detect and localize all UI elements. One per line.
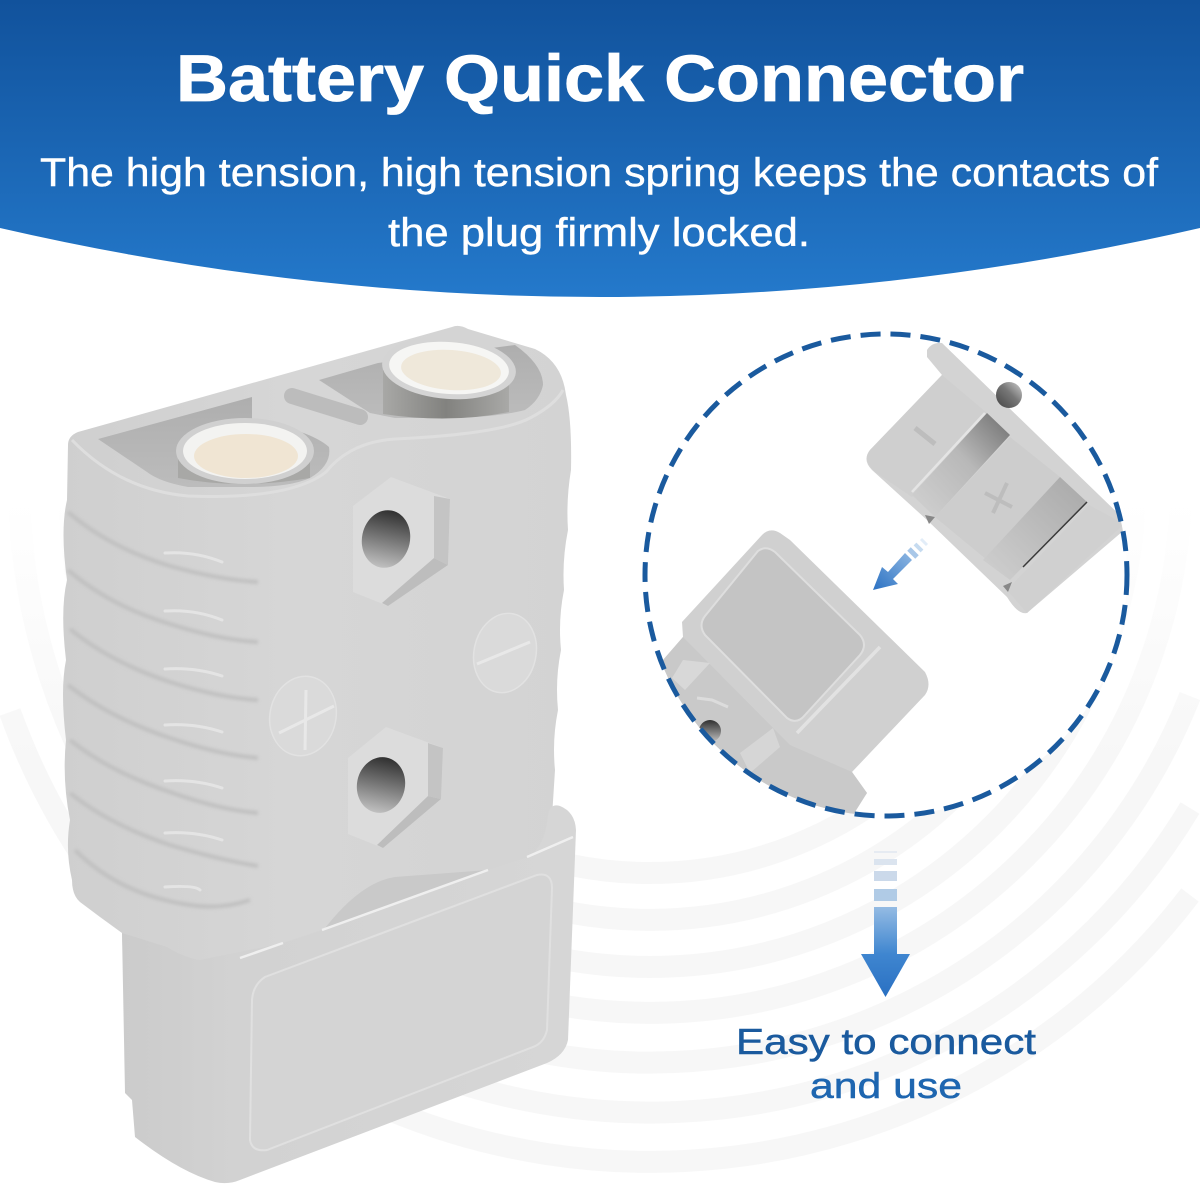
hole bbox=[996, 382, 1022, 408]
channel bbox=[918, 413, 1010, 512]
connector pieces bbox=[630, 343, 1130, 820]
detail circle bbox=[630, 334, 1130, 820]
panel bbox=[702, 548, 864, 721]
header banner bbox=[0, 0, 1200, 297]
upper connector piece bbox=[866, 343, 1130, 613]
subtitle: The high tension, high tension spring keeps the contacts of bbox=[40, 151, 1159, 195]
right terminal bbox=[380, 332, 518, 419]
caption: and use bbox=[810, 1065, 962, 1106]
subtitle: the plug firmly locked. bbox=[388, 211, 810, 255]
rim highlight bbox=[72, 390, 563, 496]
left terminal recess bbox=[98, 397, 329, 487]
caption: Easy to connect bbox=[736, 1021, 1036, 1062]
hole bbox=[352, 753, 410, 817]
minus mark bbox=[915, 428, 935, 444]
body ribs bbox=[68, 512, 258, 907]
handle bbox=[122, 805, 576, 1183]
connector body bbox=[63, 326, 571, 980]
subtitle bbox=[40, 151, 1159, 255]
bottom hex nut recess bbox=[348, 727, 443, 848]
top hex nut recess bbox=[353, 477, 450, 606]
front column seam bbox=[346, 480, 348, 905]
centre slot bbox=[292, 396, 360, 417]
handle panel bbox=[250, 875, 552, 1150]
small arrow bbox=[873, 539, 927, 590]
hole bbox=[356, 506, 416, 572]
minus symbol bbox=[466, 607, 544, 699]
lower cut-away bbox=[322, 870, 488, 932]
main connector photo bbox=[63, 326, 576, 1183]
hole bbox=[699, 720, 721, 742]
plus symbol bbox=[269, 676, 337, 756]
plus mark bbox=[985, 483, 1012, 513]
left terminal bbox=[176, 418, 314, 484]
right terminal recess bbox=[319, 345, 543, 418]
background arcs bbox=[10, 482, 1190, 1162]
dashed circle outline bbox=[645, 334, 1127, 816]
down arrow bbox=[861, 851, 910, 997]
handle edge highlights bbox=[240, 837, 573, 958]
caption bbox=[736, 1021, 1036, 1106]
title: Battery Quick Connector bbox=[176, 41, 1024, 115]
lower connector piece bbox=[663, 530, 928, 814]
